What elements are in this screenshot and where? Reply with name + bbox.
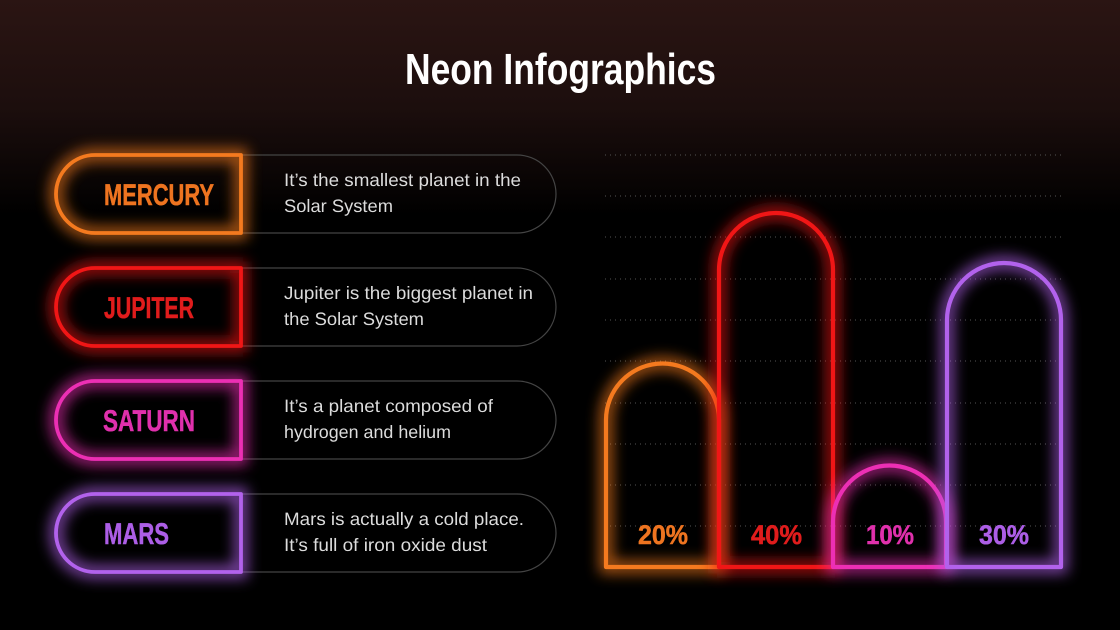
- description pill: saturn: hydrogen and helium: [284, 422, 451, 442]
- description pill: mercury: [242, 155, 556, 233]
- neon label: mercury: [56, 155, 241, 233]
- neon label: mars: MARS: [104, 518, 169, 551]
- bar: saturn 10%: [833, 466, 946, 567]
- neon label: mercury: MERCURY: [104, 179, 214, 212]
- bar: mars 30%: 30%: [979, 520, 1029, 550]
- bar: jupiter 40%: [719, 213, 833, 567]
- neon label: jupiter: JUPITER: [104, 292, 194, 325]
- neon label: mars: [56, 494, 241, 572]
- panel: jupiter row: [56, 268, 556, 346]
- panel: saturn row: [56, 381, 556, 459]
- panel: mercury row: [56, 155, 556, 233]
- bar chart: [605, 155, 1061, 567]
- bar: mars 30%: [947, 263, 1061, 567]
- bar: mercury 20%: 20%: [638, 520, 688, 550]
- description pill: jupiter: Jupiter is the biggest planet in: [284, 283, 533, 303]
- bar: jupiter 40%: 40%: [751, 520, 802, 550]
- description pill: jupiter: [242, 268, 556, 346]
- description pill: mars: It’s full of iron oxide dust: [284, 535, 487, 555]
- description pill: mercury: Solar System: [284, 196, 393, 216]
- description pill: mars: [242, 494, 556, 572]
- description pill: mercury: It’s the smallest planet in the: [284, 170, 521, 190]
- neon label: saturn: [56, 381, 241, 459]
- description pill: jupiter: the Solar System: [284, 309, 424, 329]
- bar: saturn 10%: 10%: [866, 520, 914, 550]
- neon label: saturn: SATURN: [103, 405, 195, 438]
- description pill: saturn: It’s a planet composed of: [284, 396, 494, 416]
- neon label: jupiter: [56, 268, 241, 346]
- bar: mercury 20%: [606, 364, 719, 567]
- title: Neon Infographics: [405, 45, 716, 94]
- description pill: mars: Mars is actually a cold place.: [284, 509, 524, 529]
- description pill: saturn: [242, 381, 556, 459]
- panel: mars row: [56, 494, 556, 572]
